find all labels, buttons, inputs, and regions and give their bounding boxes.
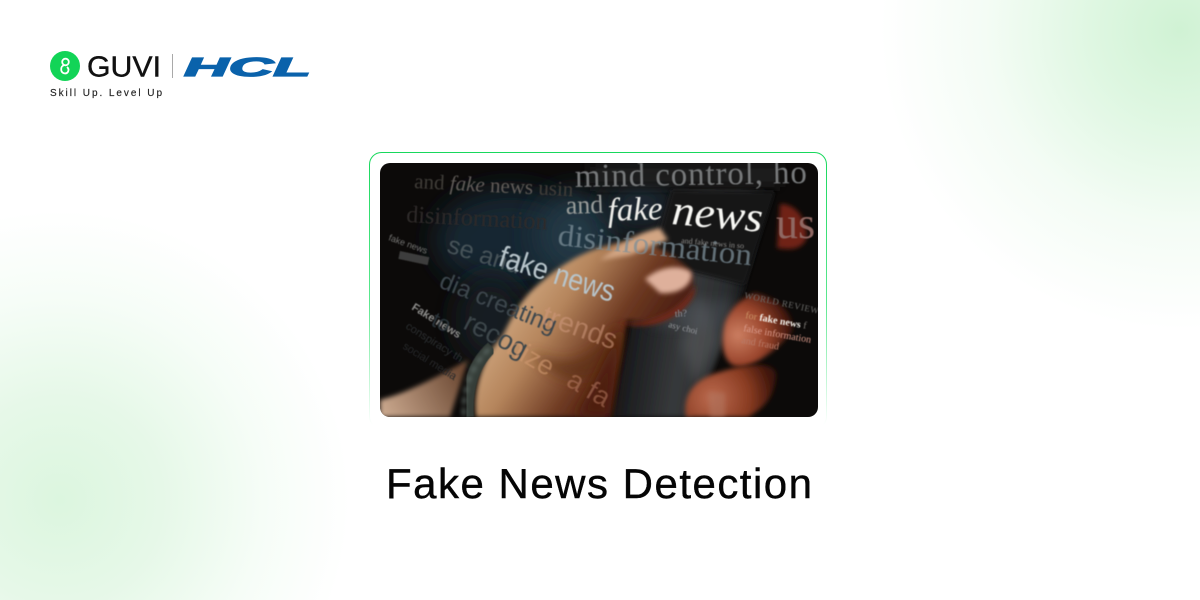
overlaid headline text: for fake news f (744, 310, 808, 332)
logo: GUVI and HCL (50, 51, 311, 99)
overlaid headline text: and fake news in so (681, 236, 744, 250)
overlaid headline text: th? (674, 308, 688, 320)
photo: hand holding phone with fake news text (380, 155, 820, 417)
overlaid headline text: us (776, 199, 815, 248)
slanted text over hand: trends (538, 300, 622, 355)
slanted text over hand: se and (444, 231, 524, 280)
overlaid headline text: and fraud (740, 335, 780, 353)
slanted text over hand: to (428, 307, 455, 337)
slanted text over hand: conspiracy th (403, 320, 465, 365)
overlaid headline text: news (670, 187, 765, 242)
arm (380, 360, 468, 417)
slanted text over hand: Fake news (409, 301, 463, 341)
overlaid headline text: and fake news usin (414, 169, 575, 201)
hand and thumb (475, 228, 695, 417)
overlaid headline text: and (565, 190, 604, 220)
overlaid headline text: disinformation (406, 202, 548, 235)
tagline: Skill Up. Level Up (50, 88, 162, 99)
bracelet (468, 347, 492, 417)
fingers (685, 293, 792, 417)
slanted text over hand: fake news (495, 240, 619, 309)
overlaid headline text: WORLD REVIEW (744, 290, 820, 316)
overlaid headline text (406, 155, 820, 353)
overlaid headline text: disinformation (556, 217, 754, 272)
slanted text over hand (387, 231, 622, 413)
slanted text over hand: social media (400, 340, 459, 383)
logo divider (172, 54, 173, 78)
overlaid headline text: asy choi (668, 319, 699, 336)
photo background (380, 163, 818, 417)
slanted text over hand: fake news (387, 232, 429, 256)
slanted text over hand: nize (502, 331, 560, 382)
phone (610, 190, 775, 417)
overlaid headline text: mind control, ho (575, 155, 807, 195)
slanted text over hand: a fa (562, 364, 617, 413)
HCL wordmark: HCL (184, 52, 311, 82)
GUVI wordmark: GUVI (87, 52, 161, 84)
overlaid headline text: false information (742, 323, 812, 346)
icon: GUVI green circle (50, 51, 80, 81)
slanted text over hand: dia creating (436, 268, 561, 339)
red finger behind top (777, 204, 806, 249)
image card frame (370, 152, 826, 428)
overlaid headline text: fake (607, 191, 663, 229)
slanted text over hand: recog (459, 307, 533, 364)
title: Fake News Detection (386, 460, 812, 507)
